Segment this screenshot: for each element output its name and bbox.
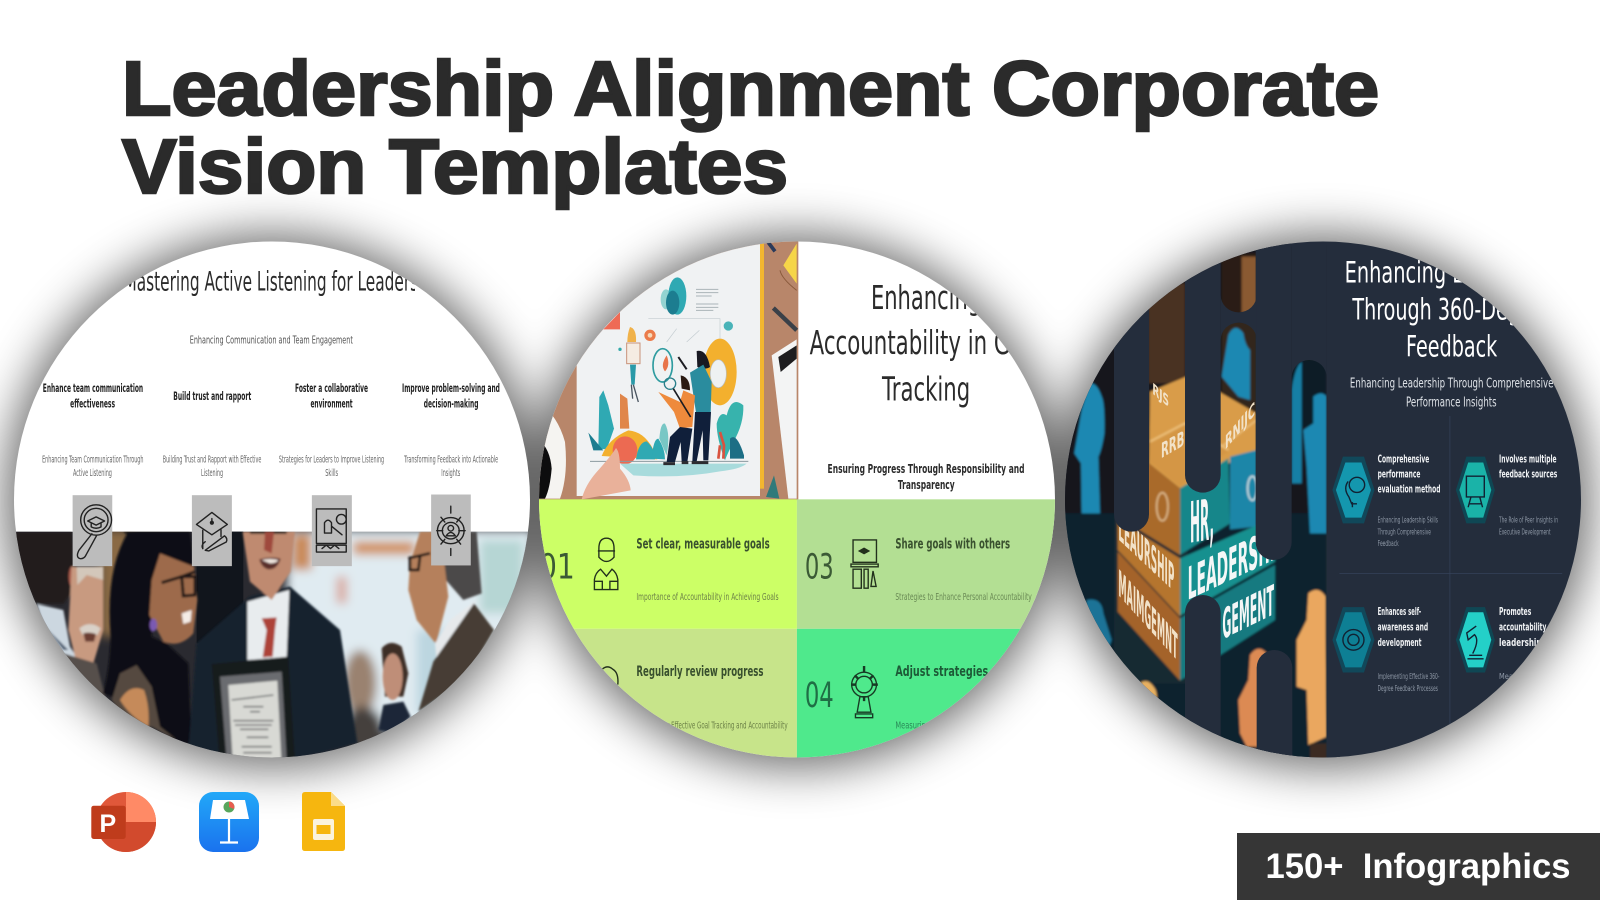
circle shadows xyxy=(6,235,1589,767)
feature: accountability: leadership roles xyxy=(1499,637,1564,649)
card 01 xyxy=(537,499,797,629)
column headings: effectiveness xyxy=(70,397,115,411)
feature: multiple feedback sources: Executive Development xyxy=(1499,527,1551,536)
photo: leadership cubes: MAIMGEMNT xyxy=(1118,561,1178,670)
background person xyxy=(382,643,408,697)
feature: comprehensive evaluation: Comprehensive xyxy=(1378,454,1429,465)
slide heading: Mastering Active Listening for Leaders xyxy=(123,266,418,297)
column headings: Enhance team communication xyxy=(43,381,143,395)
feature: accountability: Measuring Impact xyxy=(1499,671,1559,681)
column descriptions: Enhancing Team Communication Through xyxy=(42,455,144,465)
card 02: Regularly review progress xyxy=(636,664,764,680)
feature: comprehensive evaluation: Enhancing Leadership Skills xyxy=(1378,514,1438,524)
badge: 150+ Infographics xyxy=(1237,833,1600,900)
feature: comprehensive evaluation xyxy=(1332,454,1440,548)
panel: 360-degree feedback slide xyxy=(1062,241,1581,763)
card 02 xyxy=(574,628,797,758)
title: Leadership Alignment Corporate xyxy=(122,46,1379,132)
centre man xyxy=(188,587,357,760)
column descriptions: Strategies for Leaders to Improve Listening xyxy=(279,455,384,465)
slide heading: Tracking xyxy=(881,369,970,408)
photo: leadership cubes: RRB xyxy=(1161,426,1184,464)
column descriptions: Skills xyxy=(325,468,338,479)
column descriptions: Active Listening xyxy=(73,468,112,479)
feature: self-awareness: Enhances self- xyxy=(1378,606,1421,618)
card 01: Importance of Accountability in Achieving Goals xyxy=(636,592,779,603)
teal figures xyxy=(1074,383,1104,513)
slide subtitle: Ensuring Progress Through Responsibility and xyxy=(828,461,1025,476)
right man xyxy=(420,532,482,600)
column descriptions: Transforming Feedback into Actionable xyxy=(404,455,498,465)
feature: accountability: Promotes xyxy=(1499,606,1531,618)
column headings xyxy=(43,381,500,411)
far-left man xyxy=(13,532,76,604)
icon: PowerPoint xyxy=(91,792,156,852)
column headings: Improve problem-solving and xyxy=(402,381,500,395)
feature: comprehensive evaluation: Feedback xyxy=(1378,538,1399,548)
icon: PowerPoint: P xyxy=(100,810,116,838)
card 01: 01 xyxy=(539,548,575,588)
photo: leadership cubes: RNIJC xyxy=(1225,397,1255,455)
certificate frame xyxy=(212,657,295,760)
slide heading: Accountability in Goal xyxy=(810,323,1042,362)
card 02: Methods for Effective Goal Tracking and Accountability xyxy=(636,720,788,731)
column descriptions xyxy=(42,455,498,479)
icon tile: graduation cap xyxy=(192,495,232,566)
feature: comprehensive evaluation: performance xyxy=(1378,468,1420,480)
slide heading: Feedback xyxy=(1406,330,1498,365)
column headings: Build trust and rapport xyxy=(173,389,251,403)
card 03: Strategies to Enhance Personal Accountability xyxy=(895,592,1032,603)
feature: accountability: accountability xyxy=(1499,622,1547,634)
slide subtitle xyxy=(828,461,1025,492)
slide subtitle: Performance Insights xyxy=(1406,395,1497,410)
icon tile: magnifier xyxy=(73,495,112,566)
panel: accountability slide xyxy=(533,239,1057,760)
slide subtitle: Enhancing Communication and Team Engagement xyxy=(190,334,353,347)
feature: accountability xyxy=(1456,607,1546,679)
title: Vision Templates xyxy=(122,124,788,210)
feature: self-awareness xyxy=(1332,606,1439,693)
card 04: Measuring Success and Adjusting Plans xyxy=(895,720,1026,731)
column headings: decision-making xyxy=(424,397,478,411)
panel: active listening slide xyxy=(13,241,533,765)
feature: comprehensive evaluation: Through Comprehensive xyxy=(1377,527,1431,536)
photo: leadership cubes: LEADERSHI xyxy=(1188,518,1275,611)
slide heading xyxy=(810,284,1008,408)
card 03: Share goals with others xyxy=(895,537,1010,553)
column descriptions: Building Trust and Rapport with Effective xyxy=(163,455,261,465)
orange cubes xyxy=(1149,375,1257,488)
icon tile: gear with person xyxy=(431,494,471,565)
pill cut-outs xyxy=(1114,243,1340,763)
icon: Keynote xyxy=(199,792,259,852)
cube lettering: HR, xyxy=(1190,487,1214,557)
photo: leadership cubes xyxy=(1062,243,1340,763)
card 03: 03 xyxy=(805,548,834,588)
teal cubes xyxy=(1180,458,1230,555)
older man xyxy=(68,567,103,663)
feature: multiple feedback sources: feedback sources xyxy=(1499,468,1557,480)
slide subtitle: Transparency xyxy=(898,477,955,492)
card 01: Set clear, measurable goals xyxy=(636,537,770,553)
column descriptions: Insights xyxy=(441,468,460,479)
card 03 xyxy=(797,499,1057,629)
slide subtitle xyxy=(1350,377,1553,410)
woman xyxy=(103,532,192,743)
feature: self-awareness: awareness and xyxy=(1378,622,1428,634)
wooden figures xyxy=(1297,590,1327,745)
feature: comprehensive evaluation: evaluation method xyxy=(1378,484,1440,495)
feature: self-awareness: Degree Feedback Processes xyxy=(1378,683,1438,693)
photo: leadership cubes: RJS xyxy=(1152,380,1169,412)
photo: leadership cubes: LEAURSHIP xyxy=(1118,506,1174,601)
slide heading xyxy=(1346,260,1514,357)
title xyxy=(122,46,1379,210)
feature: self-awareness: development xyxy=(1378,637,1422,649)
column headings: environment xyxy=(310,397,353,411)
card 04 xyxy=(796,628,1020,758)
feature: multiple feedback sources xyxy=(1456,454,1558,536)
photo: desk illustration xyxy=(533,239,798,500)
feature: multiple feedback sources: Involves multiple xyxy=(1499,454,1557,465)
icon: Google Slides xyxy=(302,792,345,851)
column descriptions: Listening xyxy=(201,468,223,479)
photo: leaders shaking hands xyxy=(13,530,533,765)
feature: self-awareness: Implementing Effective 360- xyxy=(1378,671,1439,681)
card 04: Adjust strategies as needed xyxy=(895,664,1047,680)
card 04: 04 xyxy=(805,676,834,716)
column headings: Foster a collaborative xyxy=(295,381,368,395)
badge: 150+ Infographics: 150+ Infographics xyxy=(1266,847,1570,886)
photo: leadership cubes: GEMENT xyxy=(1222,576,1274,650)
slide heading: Enhancing xyxy=(871,278,981,317)
cube lettering xyxy=(1188,499,1274,638)
icon tile: presentation board xyxy=(312,495,352,566)
